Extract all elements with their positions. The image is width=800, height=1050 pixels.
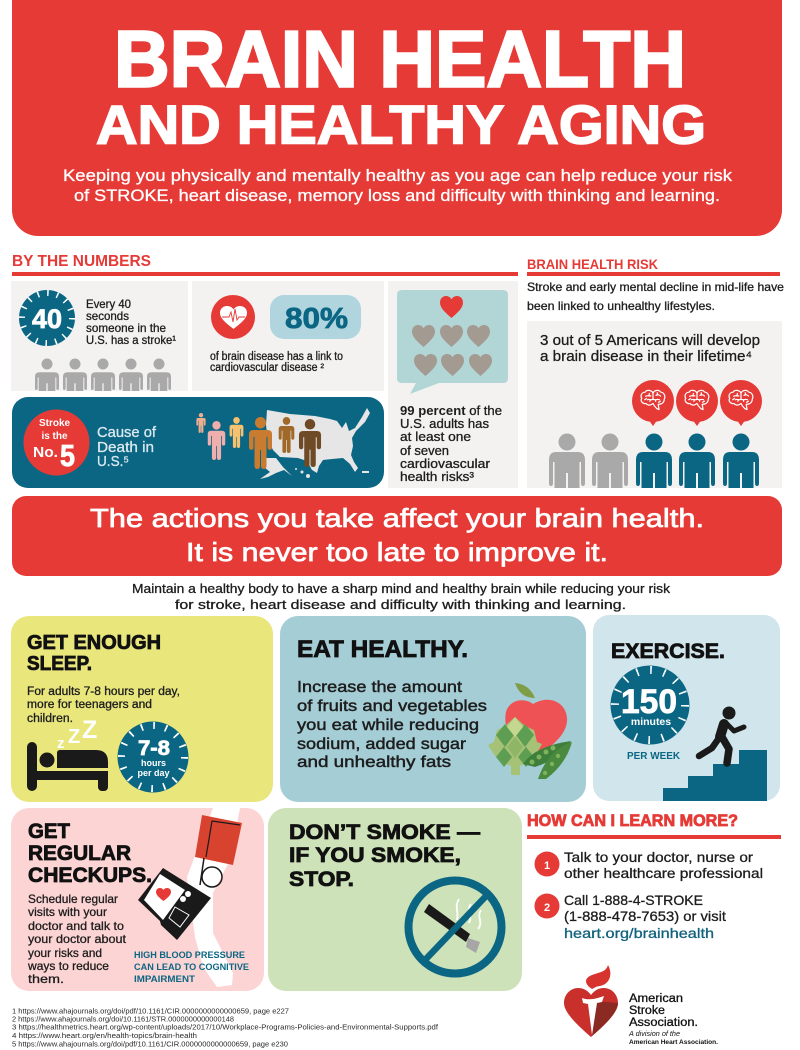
text: eat healthy: of fruits and vegetables [297,698,487,715]
heading: don't smoke: IF YOU SMOKE, [289,844,461,867]
text: logo wordmark: American Heart Association. [629,1039,718,1046]
text: sleep: more for teenagers and [27,699,152,711]
panel: get regular checkups [11,808,264,991]
banner: actions: The actions you take affect your brain health. [90,503,704,533]
text: 99 percent: health risks³ [400,470,474,484]
heading: checkups: REGULAR [28,842,131,865]
icon: us map [260,408,370,479]
panel: 3 out of 5 americans [527,321,782,488]
footnotes: 1 https://www.ahajournals.org/doi/pdf/10.1161/CIR.0000000000000659, page e227 [12,1008,289,1016]
text: checkups: visits with your [28,905,107,919]
text: high blood pressure: CAN LEAD TO COGNITIVE [134,962,249,973]
icon: 7-8 hours clock: hours [141,758,166,768]
heading: checkups: CHECKUPS. [28,864,152,887]
title: BRAIN HEALTH [114,14,686,104]
text: eat healthy: sodium, added sugar [297,736,467,753]
text: sleep: For adults 7-8 hours per day, [27,686,180,698]
heading: by the numbers: BY THE NUMBERS [12,253,151,270]
text: 99 percent: 99 percent of the [400,404,502,418]
heading: don't smoke: STOP. [289,868,354,891]
panel: 80 percent [192,281,384,391]
icon: runner [699,706,744,763]
icon: zzz [57,716,97,752]
panel: get enough sleep [11,616,273,802]
text: 3 out of 5: a brain disease in their lifetime⁴ [540,349,752,365]
text: eat healthy: you eat while reducing [297,717,479,734]
text: eat healthy: Increase the amount [297,679,463,696]
icon: zzz: Z [68,726,80,748]
step 2: Call 1-888-4-STROKE [564,892,703,908]
text: 99 percent: U.S. adults has [400,417,489,431]
heading: learn more [527,812,781,839]
header banner [12,0,782,236]
icon: stairs [663,750,767,801]
text: logo wordmark: Association. [629,1017,698,1029]
icon: bed [27,742,108,791]
stat: 80% [270,295,361,339]
badge: stroke is the no. 5: No. [33,444,58,461]
icon: 7-8 hours clock: 7-8 [138,737,170,760]
footnotes: 2 https://www.ahajournals.org/doi/10.1161/STR.0000000000000148 [12,1016,234,1024]
text: eat healthy: and unhealthy fats [297,754,451,771]
panel: no. 5 cause of death [12,397,384,488]
footnotes: 3 https://healthmetrics.heart.org/wp-content/uploads/2017/10/Workplace-Programs-Policies-and-Environmental-Supports.pdf [12,1024,438,1032]
stat: 80%: 80% [285,303,348,335]
badge: stroke is the no. 5: 5 [60,438,75,473]
step 1: 1 [544,860,550,872]
panel: 99 percent [388,281,518,488]
text: 99 percent: cardiovascular [400,457,490,471]
heading: by the numbers [12,253,518,276]
text: cause of death: Death in [97,439,154,456]
text: cause of death: U.S.⁵ [97,453,129,470]
step 1: other healthcare professional [564,865,763,881]
text: checkups: Schedule regular [28,892,118,906]
text: sleep: children. [27,713,73,725]
text: every 40 seconds: Every 40 [86,297,131,311]
text: maintain a healthy body: Maintain a healthy body to have a sharp mind and healthy brain while reducing your risk [132,582,671,596]
subtitle: Keeping you physically and mentally healthy as you age can help reduce your risk [63,167,733,185]
icon: zzz: z [57,735,64,752]
icon: grey people row [35,358,171,391]
text: cause of death: Cause of [97,424,157,441]
icon: apple, artichoke and peas [488,683,572,779]
step 2 [534,892,726,941]
heading: brain health risk: BRAIN HEALTH RISK [527,256,658,272]
badge: stroke is the no. 5: Stroke [39,418,70,429]
icon: blood pressure monitor [138,815,242,940]
title: AND HEALTHY AGING [96,94,706,156]
footnotes: 5 https://www.ahajournals.org/doi/pdf/10.1161/CIR.0000000000000659, page e230 [12,1042,288,1048]
banner: actions [12,496,782,576]
text: 99 percent: at least one [400,430,471,444]
text: brain disease link: cardiovascular disease ² [210,362,324,374]
step 1 [534,849,763,881]
footnotes: 4 https://www.heart.org/en/health-topics/brain-health [12,1033,197,1040]
text: logo wordmark: A division of the [628,1031,680,1038]
heading: sleep: SLEEP. [27,653,92,675]
heading: checkups: GET [28,820,70,843]
step 1: Talk to your doctor, nurse or [564,849,753,865]
subtitle: of STROKE, heart disease, memory loss and difficulty with thinking and learning. [74,187,720,205]
icon: grey and teal people [549,434,759,488]
icon: 40 clock: 40 [32,304,62,334]
label: per week: PER WEEK [627,750,680,762]
heading: exercise: EXERCISE. [611,640,725,663]
text: 99 percent: of seven [400,444,449,458]
text: logo wordmark: American [629,993,683,1005]
logo: american stroke association [564,965,718,1046]
panel: exercise [593,615,780,801]
heading: sleep: GET ENOUGH [27,632,161,654]
icon: speech bubble with hearts [397,290,508,394]
icon: 150 minutes clock: minutes [631,716,671,728]
text: logo wordmark [628,993,718,1046]
text: every 40 seconds: someone in the [86,321,166,335]
step 2: 2 [544,902,550,914]
icon: 7-8 hours clock: per day [137,768,170,778]
text: eat healthy [297,679,487,771]
icon: no smoking sign [408,880,502,974]
heading: don't smoke [289,821,480,891]
footnotes [12,1008,438,1048]
icon: 40 clock [19,290,75,346]
heading: sleep [27,632,161,675]
text: maintain a healthy body: for stroke, heart disease and difficulty with thinking and learning. [175,598,626,612]
text: checkups [27,892,127,986]
text: high blood pressure: HIGH BLOOD PRESSURE [134,950,245,961]
text: checkups: your doctor about [28,932,127,946]
badge: stroke is the no. 5 [24,410,90,476]
text: checkups: your risks and [28,946,102,960]
subtitle [63,167,733,205]
text: brain health risk intro [527,280,784,313]
text: checkups: them. [28,972,64,986]
icon: diverse people [196,413,321,469]
icon: arm [187,808,240,987]
text: cause of death [97,424,157,470]
text: maintain a healthy body [132,582,671,612]
text: brain health risk intro: Stroke and early mental decline in mid-life have [527,280,784,294]
icon: 150 minutes clock: 150 [621,683,677,721]
text: 3 out of 5: 3 out of 5 Americans will develop [540,333,760,349]
step 2: heart.org/brainhealth [564,925,714,941]
text: high blood pressure: IMPAIRMENT [134,974,195,985]
icon: 7-8 hours clock [118,722,188,792]
icon: 150 minutes clock [610,666,690,744]
icon: brain pins [632,380,762,426]
heading: checkups [28,820,152,887]
heading: don't smoke: DON’T SMOKE — [289,821,480,844]
icon: heart with pulse [211,295,255,339]
panel: don't smoke [268,808,522,991]
icon: zzz: Z [82,716,97,744]
text: brain disease link [210,351,343,374]
text: sleep [27,686,180,725]
text: brain disease link: of brain disease has a link to [210,351,343,363]
text: high blood pressure [134,950,249,985]
text: checkups: ways to reduce [27,959,109,973]
heading: brain health risk [527,256,780,276]
text: checkups: doctor and talk to [28,919,124,933]
text: every 40 seconds: U.S. has a stroke¹ [86,333,176,347]
banner: actions: It is never too late to improve it. [186,537,608,567]
title [96,14,706,156]
heading: eat healthy: EAT HEALTHY. [297,636,468,663]
text: 3 out of 5 [540,333,760,365]
panel: every 40 seconds [11,281,188,391]
text: every 40 seconds: seconds [86,309,129,323]
text: 99 percent [400,404,502,484]
badge: stroke is the no. 5: is the [41,431,68,442]
section: how can i learn more [527,812,781,941]
panel: eat healthy [280,616,586,802]
text: brain health risk intro: been linked to unhealthy lifestyles. [527,299,715,313]
heading: learn more: HOW CAN I LEARN MORE? [527,812,738,830]
text: logo wordmark: Stroke [629,1005,665,1017]
text: every 40 seconds [86,297,176,347]
icon: heart and torch [564,965,618,1037]
step 2: (1-888-478-7653) or visit [564,908,726,924]
